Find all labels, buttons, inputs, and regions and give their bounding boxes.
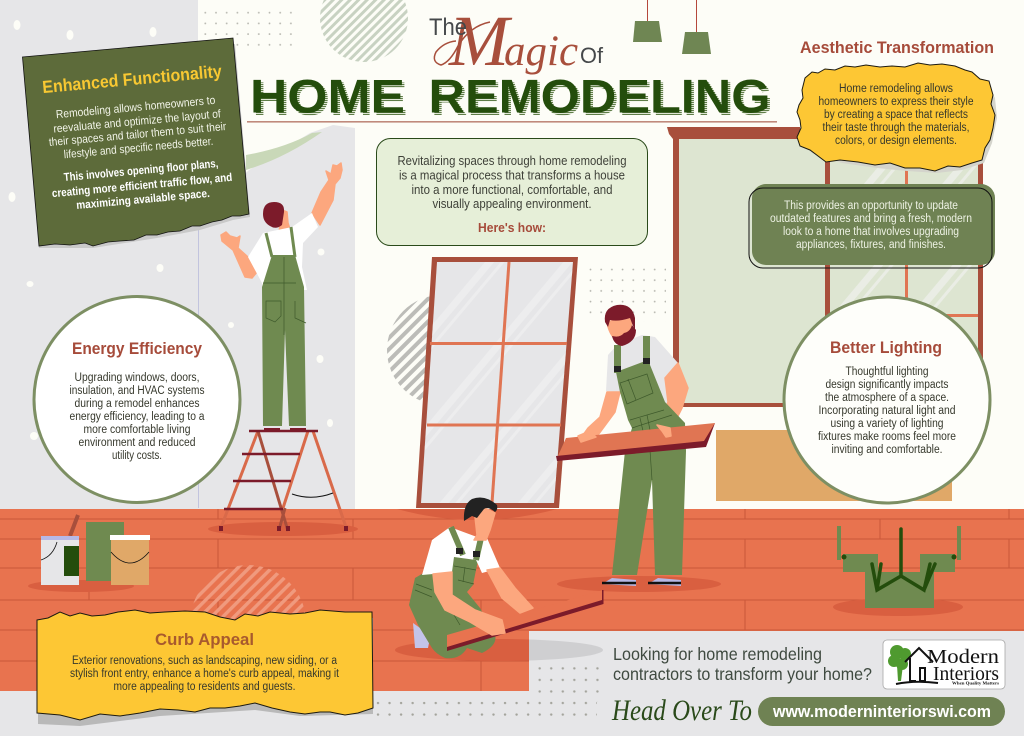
body	[770, 200, 972, 251]
body: by creating a space that reflects	[824, 109, 968, 121]
logo: Interiors	[933, 663, 999, 685]
call to action question	[613, 644, 872, 684]
right window	[667, 127, 983, 407]
body: stylish front entry, enhance a home's curb appeal, making it	[70, 668, 340, 680]
heading: Energy Efficiency	[72, 339, 202, 358]
website pill	[758, 697, 1005, 726]
title underline	[247, 121, 777, 123]
panel: intro	[376, 138, 648, 246]
body: Home remodeling allows	[839, 83, 953, 95]
heading: Curb Appeal	[155, 630, 254, 649]
aesthetic transformation heading: Aesthetic Transformation	[800, 38, 994, 57]
sand rectangle	[716, 430, 952, 501]
background: gray wall	[0, 0, 355, 509]
ladder	[208, 431, 358, 536]
body text: their spaces and tailor them to suit their	[48, 121, 227, 149]
dot rows	[376, 666, 599, 724]
bottom gray band	[0, 631, 1024, 736]
logo	[883, 640, 1005, 689]
body: more appealing to residents and guests.	[114, 681, 296, 693]
intro text: into a more functional, comfortable, and	[412, 183, 613, 197]
intro text: Revitalizing spaces through home remodeling	[398, 154, 627, 168]
website url: www.moderninteriorswi.com	[772, 703, 991, 721]
body: their taste through the materials,	[822, 122, 970, 134]
panel: enhanced functionality	[22, 38, 250, 248]
title: Home Remodeling	[250, 70, 773, 125]
body	[818, 83, 974, 147]
floor	[0, 509, 1024, 691]
body: appliances, fixtures, and finishes.	[796, 239, 946, 251]
title	[250, 1, 773, 125]
call to action question: contractors to transform your home?	[613, 664, 872, 684]
floor stripes	[190, 565, 306, 681]
body text: lifestyle and specific needs better.	[63, 136, 214, 161]
body: inviting and comfortable.	[832, 444, 942, 456]
body: energy efficiency, leading to a	[70, 411, 205, 423]
body: look to a home that involves upgrading	[783, 226, 959, 238]
title: Magic: agic	[504, 28, 578, 75]
dot grid top	[202, 11, 292, 54]
panel: curb appeal	[37, 610, 373, 726]
body: fixtures make rooms feel more	[818, 431, 956, 443]
body: colors, or design elements.	[835, 135, 957, 147]
wall spots	[8, 20, 333, 440]
intro text	[398, 154, 627, 211]
title: Home Remodeling: HOME	[252, 72, 408, 125]
body: more comfortable living	[84, 424, 190, 436]
title: Of: Of	[580, 43, 604, 68]
heading: Better Lighting	[830, 338, 942, 357]
energy efficiency circle	[34, 296, 240, 502]
center window	[397, 257, 578, 520]
body: Upgrading windows, doors,	[74, 372, 200, 384]
standing worker	[556, 305, 721, 592]
logo words: Modern	[927, 646, 999, 668]
better lighting circle	[784, 297, 990, 503]
hanging lamps	[633, 0, 711, 54]
body text: creating more efficient traffic flow, and	[51, 172, 233, 200]
body	[70, 655, 340, 693]
body text: This involves opening floor plans,	[63, 158, 219, 184]
body: Exterior renovations, such as landscaping, new siding, or a	[72, 655, 338, 667]
body text: Remodeling allows homeowners to	[55, 95, 216, 121]
aesthetic green box	[749, 184, 995, 268]
toolbox	[833, 526, 963, 616]
body: design significantly impacts	[826, 379, 949, 391]
intro text: visually appealing environment.	[432, 197, 592, 211]
aesthetic yellow blob	[797, 63, 997, 173]
body: insulation, and HVAC systems	[70, 385, 205, 397]
title: Magic	[434, 1, 578, 81]
body: homeowners to express their style	[818, 96, 974, 108]
intro text: is a magical process that transforms a house	[399, 168, 625, 182]
title: Home Remodeling: REMODELING	[428, 70, 770, 122]
body: outdated features and bring a fresh, modern	[770, 213, 972, 225]
heading: Enhanced Functionality	[41, 61, 223, 97]
kneeling worker	[395, 497, 604, 661]
logo tree	[888, 645, 911, 681]
body: This provides an opportunity to update	[784, 200, 958, 212]
body: utility costs.	[112, 450, 162, 462]
body: during a remodel enhances	[74, 398, 200, 410]
title: Home Remodeling: REMODELING	[431, 72, 773, 125]
body: using a variety of lighting	[830, 418, 944, 430]
here's how: Here's how:	[478, 221, 546, 235]
paint cans	[28, 515, 150, 592]
striped circle behind window	[387, 295, 497, 405]
wall seam	[197, 220, 200, 508]
body	[70, 372, 205, 462]
body: Incorporating natural light and	[818, 405, 956, 417]
peeled wallpaper	[246, 132, 322, 170]
title: The: The	[429, 14, 467, 41]
title: Magic: M	[448, 1, 513, 81]
logo house	[896, 648, 938, 684]
worker on ladder	[221, 163, 342, 432]
body: environment and reduced	[78, 437, 196, 449]
body: the atmosphere of a space.	[825, 392, 949, 404]
call to action question: Looking for home remodeling	[613, 644, 822, 664]
body: Thoughtful lighting	[846, 366, 928, 378]
dot grid right of window	[586, 264, 666, 322]
title: Home Remodeling: HOME	[250, 70, 405, 122]
logo: When Quality Matters	[952, 680, 999, 686]
body text: reevaluate and optimize the layout of	[53, 108, 222, 136]
body text	[48, 95, 233, 212]
striped circle top	[320, 0, 408, 62]
body	[818, 366, 956, 456]
head over to: Head Over To	[611, 694, 752, 727]
body text: maximizing available space.	[76, 188, 210, 212]
